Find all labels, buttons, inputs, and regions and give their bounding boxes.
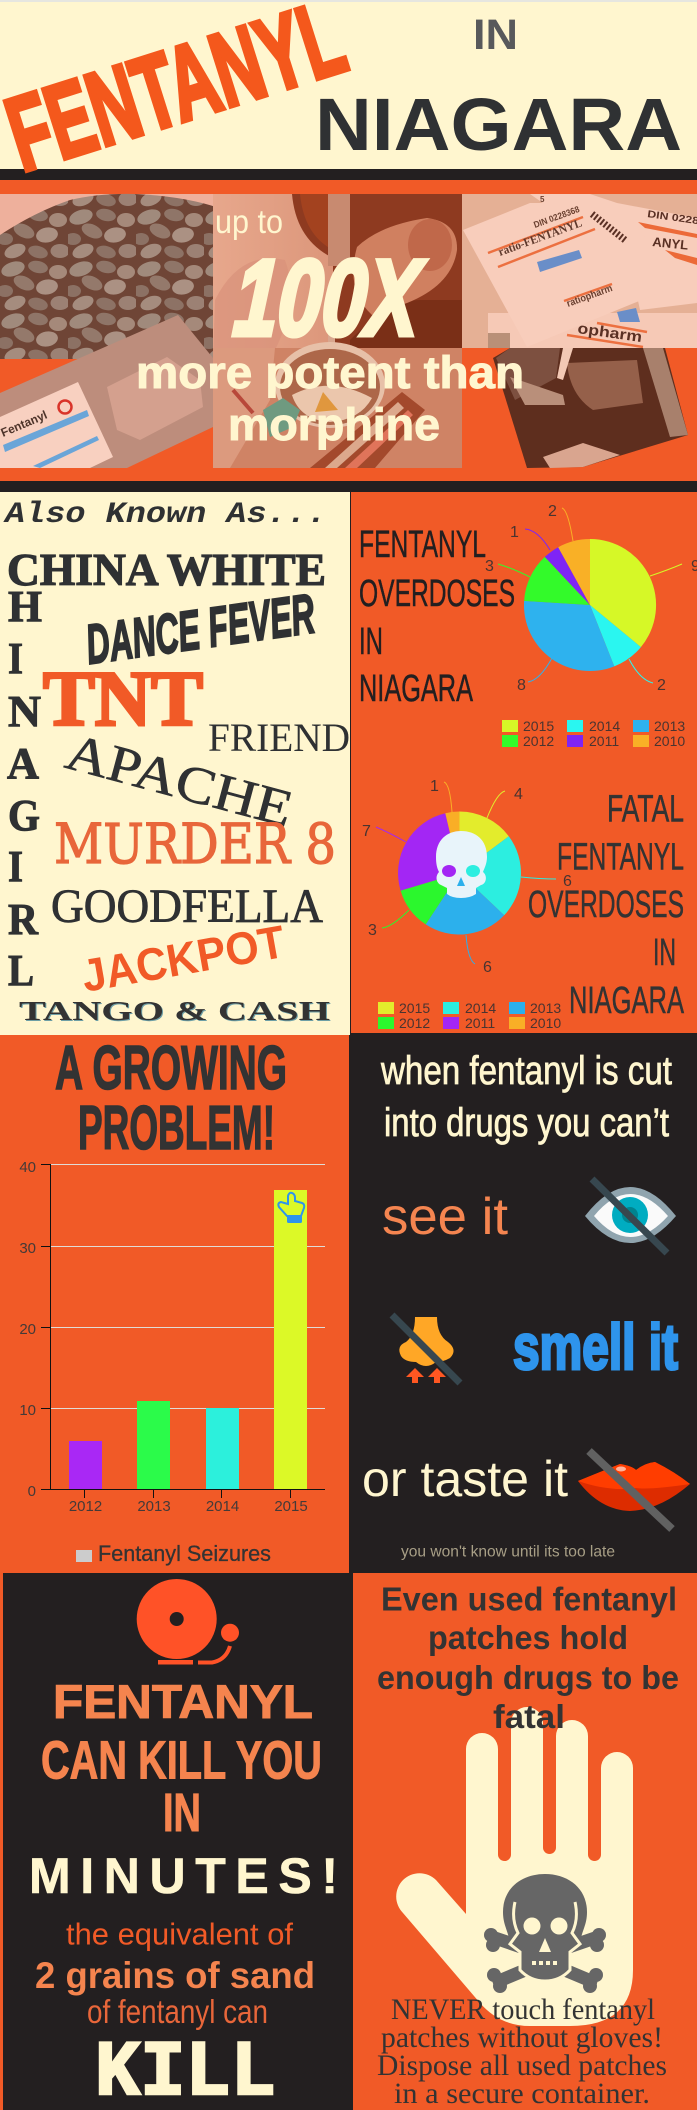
legend: fentanyl seizures: Fentanyl Seizures xyxy=(98,1541,271,1566)
name: tango and cash xyxy=(19,996,331,1027)
icon: crossed out lips xyxy=(578,1451,690,1529)
legend: overdoses: 2011 xyxy=(589,733,619,749)
text: 2 grains of sand: 2 grains of sand xyxy=(35,1955,315,1996)
icon: skull xyxy=(436,831,487,898)
name: tnt: TNT xyxy=(43,655,203,742)
text: you won't know until its too late: you won't know until its too late xyxy=(401,1544,615,1560)
name: china girl vertical: I xyxy=(8,842,23,891)
legend: fatal overdoses: 2014 xyxy=(465,1000,496,1016)
name: china white: CHINA WHITE xyxy=(7,545,326,595)
name: china girl vertical: I xyxy=(8,634,23,683)
heading: fentanyl overdoses in niagara: OVERDOSES xyxy=(359,573,515,615)
photo: patch packets: DIN 0228 xyxy=(647,209,697,227)
pie chart: overdoses xyxy=(485,503,697,694)
photo: patch packets: ratiopharm xyxy=(565,283,614,310)
heading: a growing problem: A GROWING xyxy=(55,1034,287,1103)
heading: when fentanyl is cut xyxy=(380,1049,672,1145)
photo: syringe and spoon xyxy=(213,194,462,468)
name: china girl vertical: H xyxy=(8,582,42,631)
photo: person smoking xyxy=(493,348,688,468)
name: goodfella: GOODFELLA xyxy=(51,880,323,933)
text: never touch patches: in a secure container. xyxy=(394,2077,650,2110)
name: china girl vertical: R xyxy=(8,895,39,944)
callouts: fatal values: 6 xyxy=(483,959,492,976)
heading: fatal fentanyl overdoses in niagara xyxy=(528,788,684,1022)
heading: even used patches xyxy=(377,1580,679,1735)
text: or taste it: or taste it xyxy=(362,1451,568,1507)
panel: overdose charts xyxy=(351,492,697,1033)
callouts: overdose values: 2 xyxy=(548,503,557,520)
callouts: fatal values: 3 xyxy=(368,922,377,939)
text: see it: see it xyxy=(382,1188,509,1246)
bar chart: fentanyl seizures: 10 xyxy=(19,1402,36,1419)
icon: skull and crossbones xyxy=(484,1874,606,1993)
name: friend: FRIEND xyxy=(208,715,350,760)
bar chart: fentanyl seizures: 2015 xyxy=(274,1498,308,1515)
text: never touch patches: NEVER touch fentanyl xyxy=(391,1993,655,2026)
photo: patch packets: opharm xyxy=(576,320,643,346)
text: can kill you: CAN KILL YOU xyxy=(41,1730,322,1790)
text: more potent than: more potent than xyxy=(136,347,524,398)
heading: fentanyl overdoses in niagara: NIAGARA xyxy=(359,668,473,710)
icon: alarm bell xyxy=(137,1579,239,1664)
heading: fentanyl overdoses in niagara: FENTANYL xyxy=(359,524,486,566)
legend: fatal overdoses: 2013 xyxy=(530,1000,561,1016)
text: the equivalent of: the equivalent of xyxy=(66,1916,293,1952)
name: tango and cash: TANGO & CASH xyxy=(20,997,331,1027)
name: murder 8: MURDER 8 xyxy=(54,812,336,876)
panel: potency photo collage xyxy=(0,180,697,481)
text: 100X: 100X xyxy=(230,237,428,358)
name: apache: APACHE xyxy=(60,724,299,839)
callouts: fatal values: 4 xyxy=(514,786,523,803)
callouts: overdose values: 3 xyxy=(485,558,494,575)
icon: stop hand xyxy=(396,1707,633,2026)
heading: even used patches: Even used fentanyl xyxy=(381,1580,677,1618)
legend: overdoses: 2014 xyxy=(589,718,620,734)
legend: overdoses: 2013 xyxy=(654,718,685,734)
legend: fatal overdoses: 2010 xyxy=(530,1015,561,1031)
name: china girl vertical: A xyxy=(7,739,39,788)
callouts: fatal values: 7 xyxy=(362,823,371,840)
heading: a growing problem: PROBLEM! xyxy=(78,1094,275,1163)
text: never touch patches xyxy=(377,1993,667,2110)
bar chart: fentanyl seizures: 40 xyxy=(19,1159,36,1176)
photo: fentanyl patch box xyxy=(0,315,213,468)
heading: fentanyl overdoses in niagara xyxy=(359,524,515,710)
photo: patch packets: ANYL xyxy=(652,234,689,253)
legend: overdoses: 2010 xyxy=(654,733,685,749)
legend: overdoses: 2015 xyxy=(523,718,554,734)
name: dance fever: DANCE FEVER xyxy=(82,581,319,676)
heading: even used patches: enough drugs to be xyxy=(377,1659,679,1696)
name: china girl vertical: G xyxy=(8,791,40,840)
text: never touch patches: Dispose all used patches xyxy=(377,2049,667,2082)
photo: pills xyxy=(0,194,213,359)
heading: also known as: Also Known As... xyxy=(3,498,327,532)
text: minutes: MINUTES! xyxy=(29,1848,338,1904)
callouts: overdose values: 8 xyxy=(517,677,526,694)
bar chart: fentanyl seizures: 2013 xyxy=(137,1498,171,1515)
legend: fatal overdoses: 2012 xyxy=(399,1015,430,1031)
panel: used patches warning xyxy=(353,1573,697,2110)
panel: a growing problem xyxy=(0,1034,349,1573)
legend: fatal overdoses xyxy=(378,1000,561,1031)
panel: also known as xyxy=(0,492,350,1035)
legend: fatal overdoses: 2011 xyxy=(465,1015,495,1031)
panel: cut into drugs xyxy=(350,1030,697,1573)
callouts: overdose values: 1 xyxy=(510,524,519,541)
panel: can kill in minutes xyxy=(0,1573,350,2110)
legend: overdoses xyxy=(502,718,685,749)
name: jackpot: JACKPOT xyxy=(78,915,289,1002)
title: niagara: NIAGARA xyxy=(315,83,682,166)
panel: header xyxy=(0,0,697,194)
icon: crossed out nose xyxy=(392,1315,460,1383)
icon: pointing hand xyxy=(278,1193,304,1223)
text: morphine: morphine xyxy=(228,399,440,450)
legend: fatal overdoses: 2015 xyxy=(399,1000,430,1016)
heading: even used patches: fatal xyxy=(493,1698,565,1735)
photo: patch packets: ratio-FENTANYL xyxy=(496,216,584,259)
heading: fentanyl overdoses in niagara: IN xyxy=(359,621,383,663)
name: tango and cash: TANGO & CASH xyxy=(19,996,330,1026)
bar chart: fentanyl seizures xyxy=(19,1159,325,1515)
photo: patch packets: DIN 0228368 xyxy=(532,204,581,230)
text: never touch patches: patches without gloves! xyxy=(381,2021,663,2054)
bar chart: fentanyl seizures: 2014 xyxy=(206,1498,239,1515)
text: of fentanyl can: of fentanyl can xyxy=(87,1993,268,2030)
photo: patch packets xyxy=(462,194,697,348)
bar chart: fentanyl seizures: 2012 xyxy=(69,1498,102,1515)
heading: fatal fentanyl overdoses in niagara: IN xyxy=(653,932,676,974)
photo: fentanyl patch box: Fentanyl xyxy=(0,408,49,440)
bar chart: fentanyl seizures: 20 xyxy=(19,1321,36,1338)
callouts: overdose values xyxy=(485,503,697,694)
title: in: IN xyxy=(473,11,518,59)
callouts: fatal values: 1 xyxy=(430,778,439,795)
name: china girl vertical xyxy=(7,582,42,995)
bar chart: fentanyl seizures: 0 xyxy=(28,1483,36,1500)
heading: even used patches: patches hold xyxy=(428,1619,628,1656)
callouts: overdose values: 2 xyxy=(657,677,666,694)
icon: crossed out eye xyxy=(585,1179,676,1253)
heading: a growing problem xyxy=(55,1034,287,1163)
name: china girl vertical: L xyxy=(8,946,34,995)
callouts: fatal values: 6 xyxy=(563,873,572,890)
text: in: IN xyxy=(163,1783,201,1843)
pie chart: fatal overdoses xyxy=(362,778,572,976)
bar chart: fentanyl seizures: 30 xyxy=(19,1240,36,1257)
photo: patch packets: 5 xyxy=(540,195,545,204)
legend: overdoses: 2012 xyxy=(523,733,554,749)
name: china girl vertical: N xyxy=(8,687,41,736)
text: fentanyl: FENTANYL xyxy=(53,1675,313,1728)
callouts: fatal values xyxy=(362,778,572,976)
text: up to: up to xyxy=(215,203,283,240)
